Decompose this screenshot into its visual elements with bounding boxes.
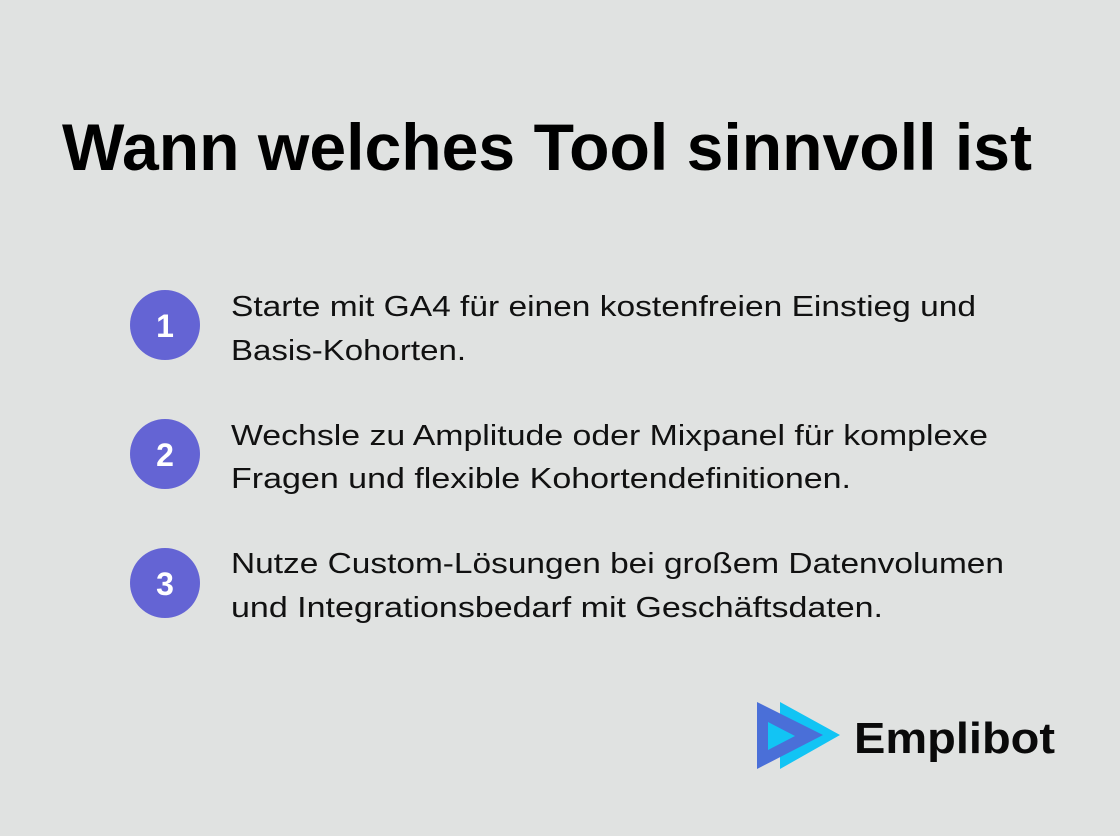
text: item 3: und Integrationsbedarf mit Geschäftsdaten. (231, 592, 883, 624)
item 2 (130, 419, 988, 495)
item 1 (130, 290, 976, 367)
text: item 1: Basis-Kohorten. (231, 335, 466, 367)
icon: number 2 circle: 2 (156, 437, 174, 473)
icon: number 2 circle (130, 419, 200, 489)
text: item 3 (231, 548, 1004, 624)
icon: number 1 circle: 1 (156, 308, 174, 344)
text: item 1 (231, 291, 976, 367)
title: Wann welches Tool sinnvoll ist (62, 110, 1032, 184)
icon: number 1 circle (130, 290, 200, 360)
text: item 2 (231, 420, 988, 495)
icon: number 3 circle (130, 548, 200, 618)
text: item 3: Nutze Custom-Lösungen bei großem Datenvolumen (231, 548, 1004, 580)
icon: logo triangles (757, 702, 840, 769)
text: item 2: Wechsle zu Amplitude oder Mixpanel für komplexe (231, 420, 988, 452)
item 3 (130, 548, 1004, 624)
text: item 1: Starte mit GA4 für einen kostenfreien Einstieg und (231, 291, 976, 323)
logo: Emplibot (757, 702, 1055, 769)
icon: number 3 circle: 3 (156, 566, 174, 602)
logo text: Emplibot (854, 714, 1055, 763)
text: item 2: Fragen und flexible Kohortendefinitionen. (231, 463, 851, 495)
